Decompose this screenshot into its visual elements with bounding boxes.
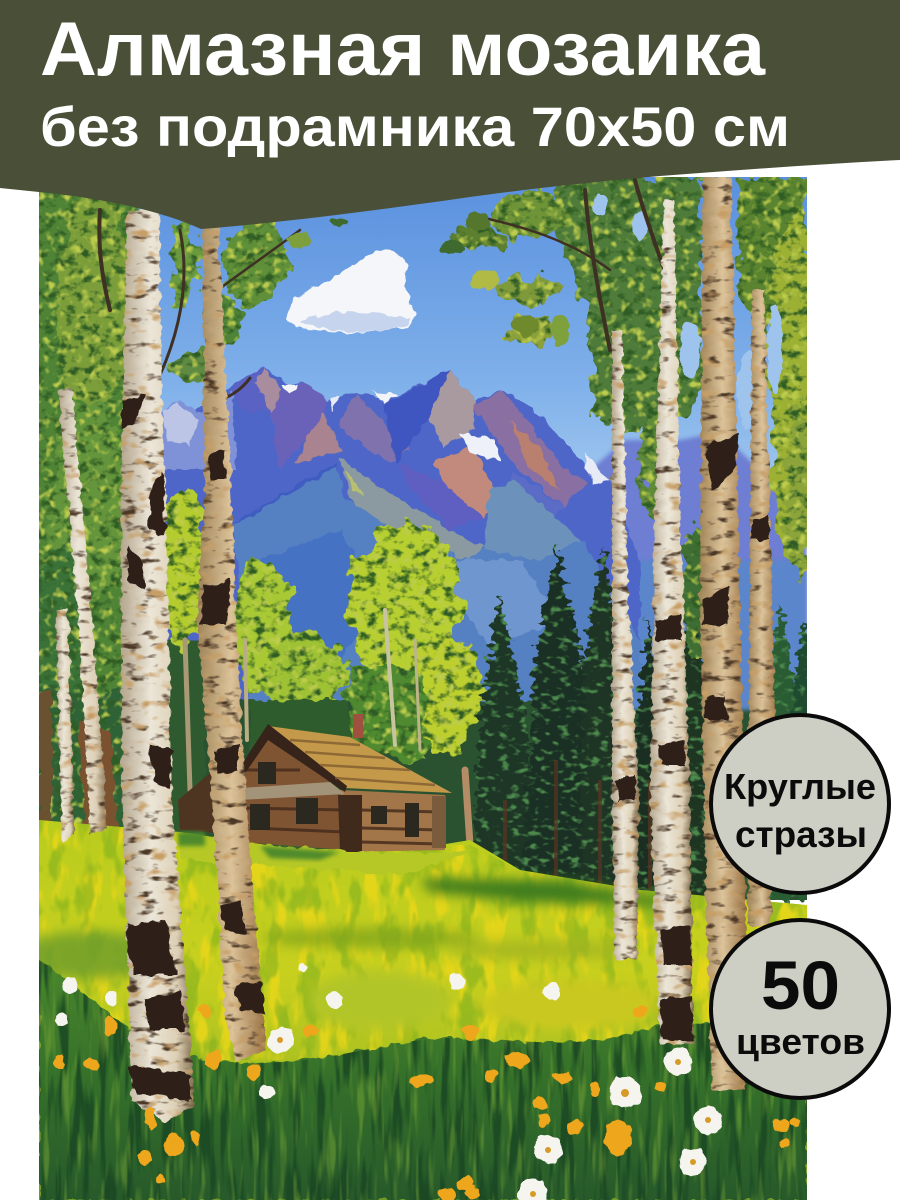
facet: orange cliff xyxy=(433,447,500,517)
white daisies xyxy=(55,963,722,1200)
cloud xyxy=(287,250,414,333)
mid distance bright trees xyxy=(159,485,483,760)
lower slope xyxy=(233,468,640,700)
meadow shadow patches xyxy=(20,878,660,1030)
badge circle xyxy=(711,920,889,1098)
cabin windows and door xyxy=(250,762,419,837)
sparse leaves on right branches xyxy=(454,193,568,346)
label colours: цветов xyxy=(736,1021,865,1062)
roof shingles xyxy=(290,740,435,785)
cabin front wall xyxy=(244,740,340,850)
corner logs xyxy=(338,795,362,852)
dark ridge shadow xyxy=(234,462,337,524)
facet: peak C grey xyxy=(428,370,475,447)
birch trunks xyxy=(121,177,776,1122)
grass in front of cabin xyxy=(180,835,478,875)
mountains: far range on the right xyxy=(595,434,807,645)
far left peak xyxy=(160,390,236,470)
cabin log wall right xyxy=(340,790,445,852)
red-brown conifer trunks xyxy=(505,760,650,890)
foreground grass blades xyxy=(39,950,807,1200)
cabin roof xyxy=(268,726,452,793)
badge: round rhinestones xyxy=(711,715,889,893)
badge text line 1: Круглые xyxy=(724,766,876,807)
lower right green stems xyxy=(639,400,814,660)
hedge shadow by cabin xyxy=(178,832,340,860)
cabin side shed xyxy=(178,773,215,833)
light log beam xyxy=(240,782,345,800)
top right foliage xyxy=(550,177,821,570)
snow patches xyxy=(460,432,500,462)
sky xyxy=(138,177,807,470)
birch trunk 3 xyxy=(700,177,746,1090)
birch trunk 2 xyxy=(197,225,266,1062)
facet: mid purple xyxy=(397,463,483,530)
badge circle xyxy=(711,715,889,893)
header banner xyxy=(0,0,900,229)
birch trunk 4 xyxy=(650,200,693,1045)
background foliage left xyxy=(39,192,138,827)
birch trunk 1 xyxy=(121,210,195,1122)
log lines xyxy=(242,770,440,844)
facet: peak D xyxy=(473,390,587,507)
daisy centres xyxy=(277,1037,711,1197)
meadow foreground dark grass xyxy=(39,960,807,1200)
thin background stems xyxy=(185,610,470,845)
chimney xyxy=(353,714,363,738)
left under canopy dark xyxy=(166,640,204,700)
conifers xyxy=(470,543,815,900)
mountains: lower right blue xyxy=(632,560,807,714)
back birch far left xyxy=(56,610,74,842)
meadow far xyxy=(39,820,807,1200)
sky peeks through right foliage xyxy=(593,195,783,428)
title: Алмазная мозаика xyxy=(40,7,766,92)
painting: cabin in birch forest with mountains xyxy=(20,170,821,1200)
facet: peak B xyxy=(337,393,410,463)
back birch left xyxy=(58,388,108,835)
top left and centre foliage xyxy=(170,219,287,383)
subtitle: без подрамника 70х50 см xyxy=(40,95,790,158)
branches xyxy=(99,180,668,400)
number 50: 50 xyxy=(761,947,840,1024)
birch trunk 5 xyxy=(612,330,639,960)
birch trunk 6 xyxy=(748,290,776,925)
mountain base xyxy=(160,367,640,700)
yellow flowers xyxy=(53,1002,800,1200)
facet: peak A xyxy=(253,368,283,413)
cabin xyxy=(178,714,452,852)
facet: shoulder xyxy=(297,413,343,463)
rust undergrowth left xyxy=(39,690,118,830)
badge text line 2: стразы xyxy=(735,814,867,855)
loose leaves xyxy=(288,213,570,346)
bark dark patches xyxy=(122,395,770,1100)
facet: peak C blue xyxy=(383,370,450,463)
dark gap behind cabin xyxy=(250,700,350,760)
base behind forest xyxy=(174,699,807,900)
badge: 50 colours xyxy=(711,920,889,1098)
mountains: main range xyxy=(160,367,640,700)
meadow texture: bright grass xyxy=(39,820,807,1060)
